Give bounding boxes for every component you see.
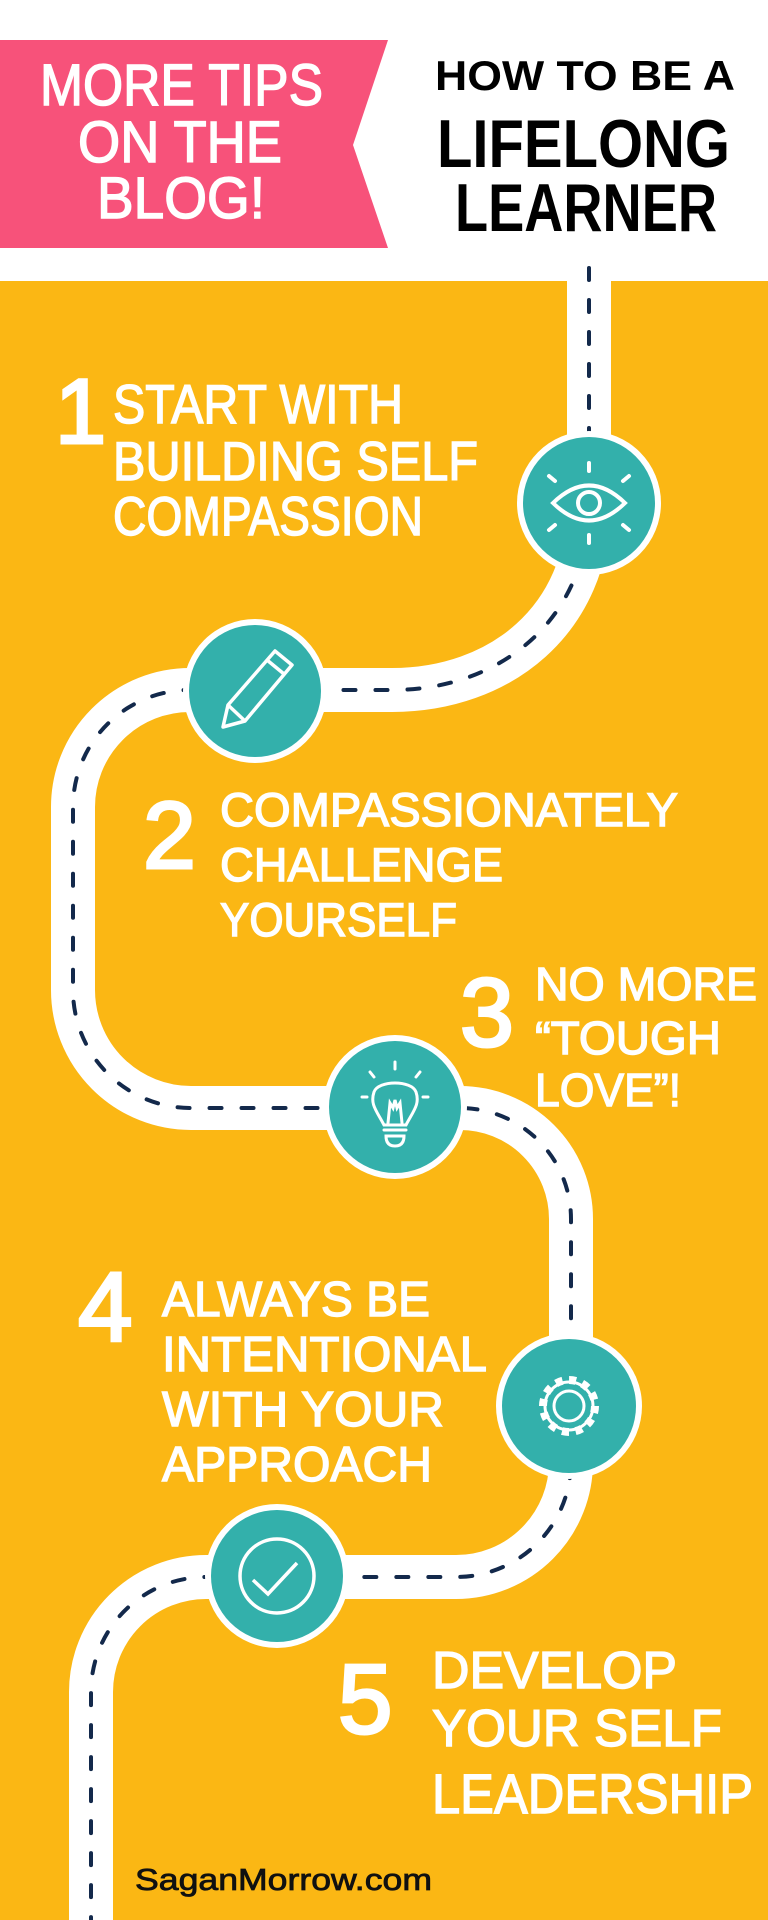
icon circle 2: pencil: [183, 619, 327, 763]
step 3 text: 3: [460, 958, 514, 1067]
step 2 text: CHALLENGE: [220, 838, 503, 891]
icon circle 3: light bulb: [323, 1035, 467, 1179]
step 3 text: [460, 958, 757, 1116]
step 2 text: YOURSELF: [220, 893, 457, 946]
icon circle 1: eye: [517, 431, 661, 575]
step 2 text: COMPASSIONATELY: [220, 783, 678, 836]
title: HOW TO BE A: [435, 52, 735, 99]
step 1 text: 1: [55, 361, 106, 463]
banner: more tips on the blog: [0, 40, 388, 248]
step 1 text: BUILDING SELF: [113, 430, 478, 492]
step 4 text: WITH YOUR: [162, 1383, 444, 1437]
step 5 text: 5: [338, 1644, 393, 1754]
step 3 text: NO MORE: [535, 958, 757, 1010]
step 3 text: “TOUGH: [535, 1012, 721, 1064]
step 1 text: COMPASSION: [113, 485, 423, 547]
banner: more tips on the blog: MORE TIPS: [40, 53, 323, 118]
step 4 text: 4: [78, 1252, 133, 1362]
step 4 text: ALWAYS BE: [162, 1273, 430, 1327]
road path: [73, 268, 589, 1920]
step 3 text: LOVE”!: [535, 1064, 681, 1116]
step 4 text: APPROACH: [162, 1438, 432, 1492]
step 5 text: YOUR SELF: [432, 1700, 722, 1758]
step 1 text: [55, 361, 478, 547]
website url: SaganMorrow.com: [135, 1862, 432, 1897]
icon circle 5: check: [205, 1504, 349, 1648]
title: [435, 52, 735, 246]
step 4 text: [78, 1252, 487, 1492]
step 2 text: [143, 783, 678, 946]
banner: more tips on the blog: ON THE: [78, 110, 282, 175]
header background: [0, 0, 768, 281]
icon circle 4: gear: [496, 1333, 642, 1479]
banner: more tips on the blog: BLOG!: [97, 166, 265, 231]
step 5 text: DEVELOP: [432, 1642, 677, 1700]
step 5 text: [338, 1642, 753, 1825]
step 1 text: START WITH: [113, 373, 403, 435]
step 4 text: INTENTIONAL: [162, 1328, 487, 1382]
step 2 text: 2: [143, 783, 196, 889]
